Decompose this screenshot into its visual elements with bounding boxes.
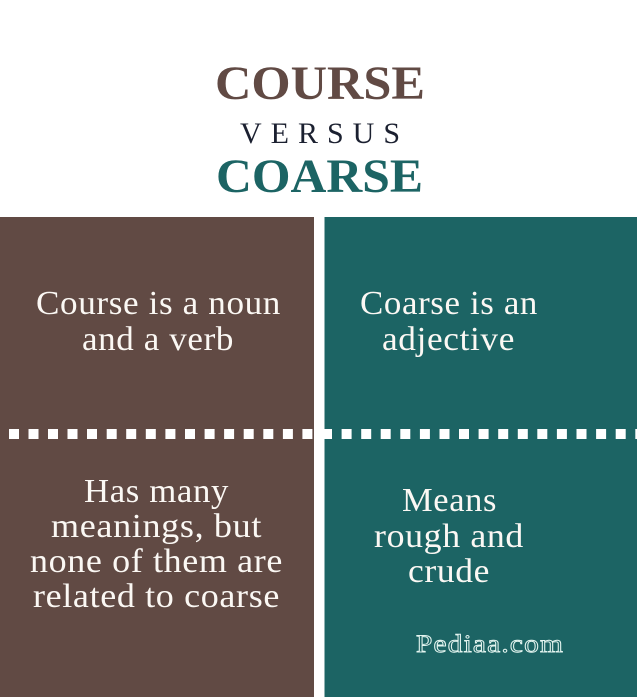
panel: course xyxy=(0,217,314,697)
text: course meaning: Has many xyxy=(84,473,229,510)
text: course part of speech: Course is a noun xyxy=(36,285,281,322)
text: coarse meaning: Means xyxy=(402,482,497,519)
text: course meaning: related to coarse xyxy=(33,578,280,615)
title: coarse: COARSE xyxy=(216,150,423,203)
text: coarse part of speech xyxy=(360,285,538,358)
text: course part of speech xyxy=(36,285,281,358)
text: course meaning: none of them are xyxy=(30,543,283,580)
text: coarse part of speech: Coarse is an xyxy=(360,285,538,322)
text: course part of speech: and a verb xyxy=(82,321,234,358)
title: course: COURSE xyxy=(215,57,425,110)
panel: coarse xyxy=(324,217,637,697)
divider: dotted line xyxy=(0,429,637,439)
title: versus: VERSUS xyxy=(240,117,400,150)
logo: Pediaa.com: Pediaa.com xyxy=(416,631,564,658)
text: course meaning xyxy=(30,473,283,615)
text: course meaning: meanings, but xyxy=(51,508,262,545)
text: coarse part of speech: adjective xyxy=(382,321,515,358)
text: coarse meaning: rough and xyxy=(374,518,524,555)
text: coarse meaning xyxy=(374,482,524,590)
text: coarse meaning: crude xyxy=(408,553,490,590)
